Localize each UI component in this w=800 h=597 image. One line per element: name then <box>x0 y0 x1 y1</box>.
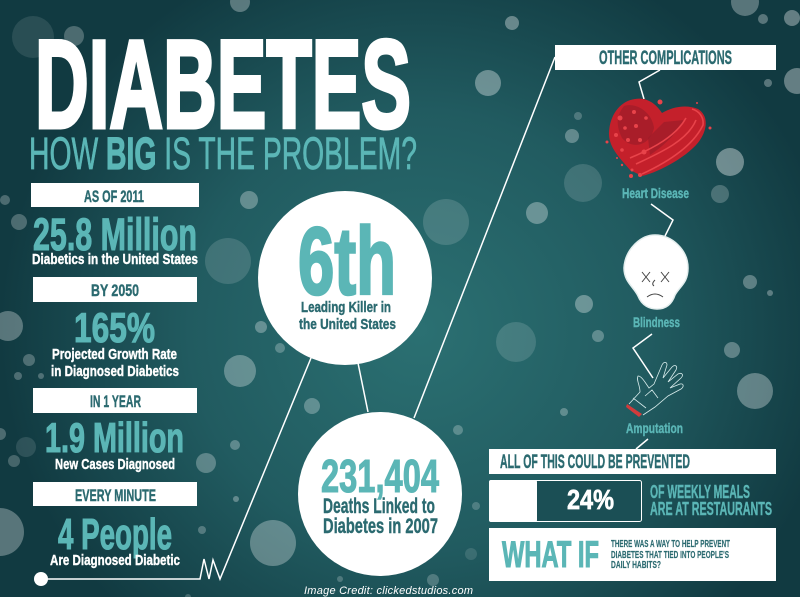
panel: as of 2011 <box>31 183 199 268</box>
label box <box>33 277 197 302</box>
label box: BY 2050 <box>91 281 139 300</box>
what if heading: WHAT IF <box>502 534 599 575</box>
progress bar: 24%: 24% <box>567 484 614 515</box>
label: blindness: Blindness <box>633 314 680 330</box>
caption: the United States <box>299 316 396 333</box>
timeline start dot <box>34 572 48 586</box>
caption <box>51 346 179 380</box>
label: heart disease: Heart Disease <box>622 185 689 201</box>
circle: deaths <box>298 412 462 576</box>
caption <box>299 299 396 333</box>
progress bar: 24% <box>489 480 642 522</box>
image credit: Image Credit: clickedstudios.com <box>304 585 473 597</box>
caption: Deaths Linked to <box>323 495 435 518</box>
caption: Leading Killer in <box>301 299 391 316</box>
title: DIABETES <box>35 16 411 154</box>
label box: EVERY MINUTE <box>75 486 156 505</box>
caption <box>323 495 438 538</box>
icon: heart <box>606 99 712 178</box>
what if text <box>611 538 730 571</box>
icon: skull face <box>624 235 688 309</box>
stat: 231,404 <box>321 450 439 502</box>
stat: 1.9 Million <box>45 414 184 461</box>
stat: 4 People <box>58 510 172 559</box>
stat: 165% <box>74 304 155 351</box>
label box: AS OF 2011 <box>84 187 144 206</box>
connector lines <box>41 57 673 579</box>
label box <box>33 482 197 506</box>
icon: hand <box>626 362 683 417</box>
what if text: DIABETES THAT TIED INTO PEOPLE'S <box>611 549 729 561</box>
panel: by 2050 <box>33 277 197 380</box>
panel: in 1 year <box>33 388 197 473</box>
meals text <box>650 482 772 519</box>
other complications heading <box>555 45 776 70</box>
what if text: DAILY HABITS? <box>611 559 661 571</box>
what if panel <box>489 528 776 581</box>
caption: New Cases Diagnosed <box>55 456 175 473</box>
subtitle: HOW BIG IS THE PROBLEM? <box>29 128 417 179</box>
caption: Diabetes in 2007 <box>323 515 438 538</box>
label box <box>31 183 199 207</box>
stat: 25.8 Million <box>33 209 197 260</box>
stat: 6th <box>298 208 396 315</box>
label box <box>33 388 197 413</box>
circle: 6th leading killer <box>258 191 432 365</box>
caption: in Diagnosed Diabetics <box>51 363 179 380</box>
panel: every minute <box>33 482 197 569</box>
caption: Diabetics in the United States <box>32 251 198 268</box>
caption: Are Diagnosed Diabetic <box>50 552 180 569</box>
caption: Projected Growth Rate <box>52 346 177 363</box>
label: amputation: Amputation <box>626 420 683 436</box>
label box: IN 1 YEAR <box>90 392 141 411</box>
